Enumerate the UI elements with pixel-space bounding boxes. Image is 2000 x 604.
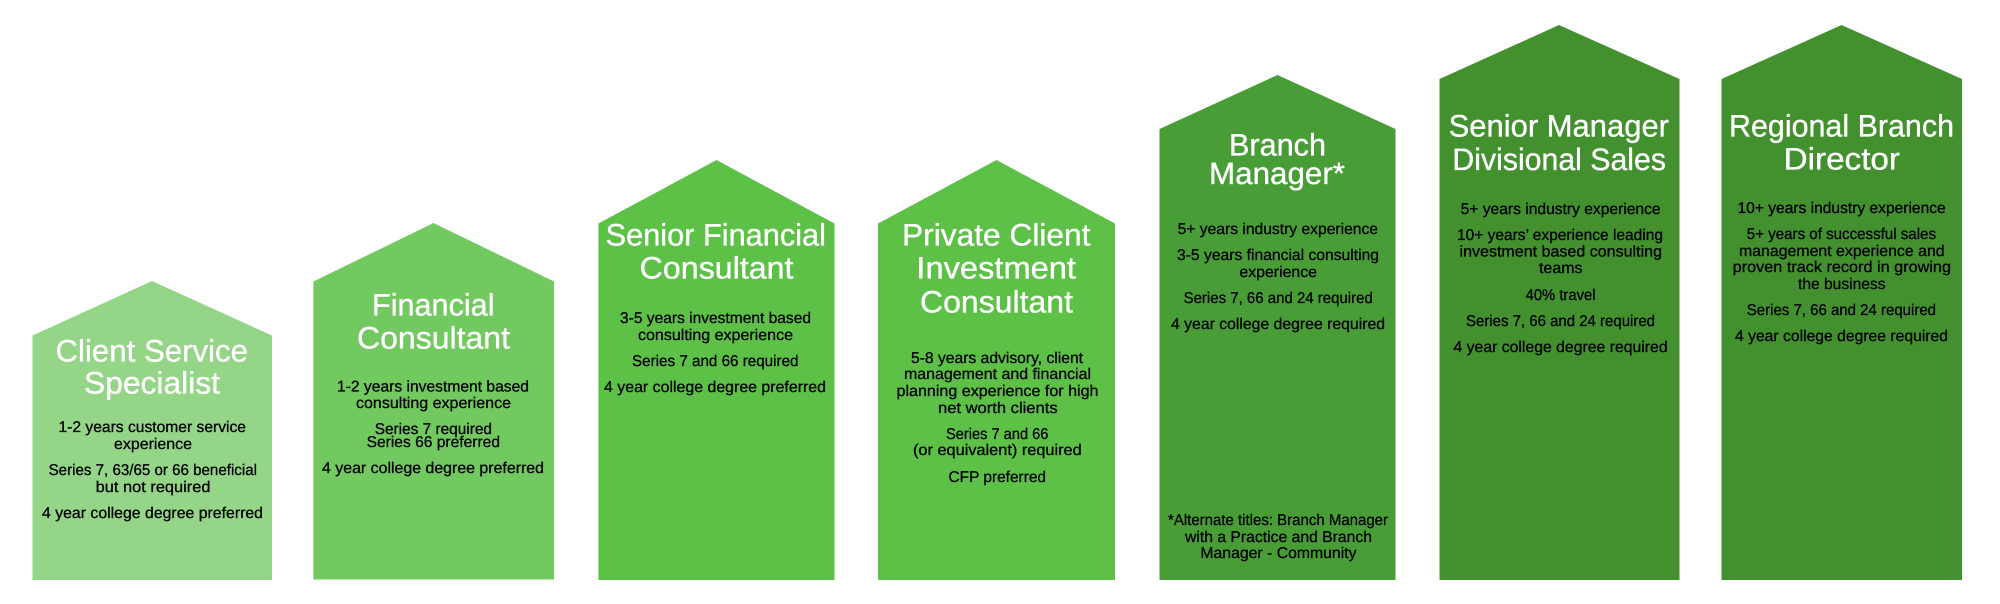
requirements: (or equivalent) required [913, 442, 1082, 459]
heading [902, 218, 1091, 319]
requirements: 40% travel [1526, 287, 1596, 304]
requirements: Series 7, 63/65 or 66 beneficial [49, 462, 257, 479]
heading: Senior Financial [606, 218, 826, 253]
heading: Branch [1229, 128, 1326, 163]
requirements: 4 year college degree preferred [322, 460, 544, 477]
heading [1729, 109, 1954, 177]
heading: Manager* [1209, 156, 1345, 191]
requirements: 4 year college degree required [1735, 328, 1948, 345]
requirements: 5+ years industry experience [1178, 221, 1378, 238]
requirements: 5+ years industry experience [1461, 201, 1661, 218]
panel: Senior Manager Divisional Sales [1440, 25, 1680, 580]
requirements: CFP preferred [948, 469, 1046, 486]
requirements: 4 year college degree preferred [604, 379, 826, 396]
requirements: Series 7, 66 and 24 required [1466, 313, 1655, 330]
heading [1449, 109, 1669, 177]
requirements: teams [1539, 260, 1583, 277]
house shape 1 [32, 281, 272, 580]
requirements: 5-8 years advisory, client [911, 350, 1084, 367]
requirements: experience [1239, 264, 1317, 281]
heading: Consultant [357, 320, 510, 355]
requirements: consulting experience [356, 395, 511, 412]
requirements [42, 419, 263, 522]
house shape 4 [878, 160, 1115, 580]
requirements: management and financial [904, 366, 1091, 383]
requirements: 4 year college degree required [1454, 339, 1668, 356]
requirements: 1-2 years investment based [337, 379, 529, 396]
house shape 7 [1722, 25, 1962, 580]
requirements [1171, 221, 1385, 333]
footnote: alternate titles [1168, 512, 1388, 562]
panel: Private Client Investment Consultant [878, 160, 1115, 580]
requirements: Series 7 and 66 [946, 426, 1048, 443]
requirements [1733, 200, 1951, 345]
heading: Director [1784, 142, 1900, 177]
requirements: proven track record in growing [1733, 259, 1951, 276]
requirements: net worth clients [938, 400, 1058, 417]
heading: Consultant [640, 251, 794, 286]
heading: Investment [916, 250, 1076, 285]
heading: Divisional Sales [1452, 142, 1666, 177]
requirements: the business [1798, 276, 1886, 293]
footnote: alternate titles: Manager - Community [1200, 545, 1357, 562]
requirements: Series 7 required [375, 421, 492, 438]
panel: Financial Consultant [313, 223, 554, 580]
requirements: 5+ years of successful sales [1747, 226, 1936, 243]
requirements: Series 7, 66 and 24 required [1747, 302, 1936, 319]
requirements: experience [114, 436, 192, 453]
requirements: management experience and [1739, 243, 1945, 260]
requirements [604, 310, 826, 396]
heading: Client Service [56, 333, 248, 368]
requirements: planning experience for high [896, 383, 1098, 400]
footnote: alternate titles: with a Practice and Branch [1184, 529, 1372, 546]
heading: Private Client [902, 218, 1091, 253]
requirements: Series 66 preferred [367, 434, 500, 451]
heading [606, 218, 826, 286]
requirements: 4 year college degree preferred [42, 505, 263, 522]
requirements: Series 7 and 66 required [632, 353, 798, 370]
requirements: consulting experience [638, 327, 793, 344]
requirements: 10+ years’ experience leading [1457, 227, 1663, 244]
requirements: 3-5 years financial consulting [1177, 247, 1379, 264]
heading [357, 288, 510, 355]
panel: Branch Manager [1160, 75, 1396, 580]
requirements: investment based consulting [1460, 244, 1662, 261]
house shape 2 [313, 223, 554, 580]
requirements: 10+ years industry experience [1738, 200, 1946, 217]
panel: Client Service Specialist [32, 281, 272, 580]
heading: Senior Manager [1449, 109, 1669, 144]
requirements: Series 7, 66 and 24 required [1184, 290, 1373, 307]
requirements [1454, 201, 1668, 356]
heading: Financial [372, 288, 494, 323]
house shape 3 [598, 160, 834, 580]
heading: Regional Branch [1729, 109, 1954, 144]
panel: Senior Financial Consultant [598, 160, 834, 580]
requirements: but not required [96, 479, 210, 496]
footnote: alternate titles: *Alternate titles: Branch Manager [1168, 512, 1388, 529]
requirements [322, 379, 544, 477]
requirements: 1-2 years customer service [58, 419, 246, 436]
requirements [896, 350, 1098, 486]
heading: Consultant [920, 284, 1073, 319]
heading [1209, 128, 1345, 191]
heading: Specialist [84, 366, 220, 401]
requirements: 3-5 years investment based [620, 310, 811, 327]
requirements: 4 year college degree required [1171, 316, 1385, 333]
house shape 6 [1440, 25, 1680, 580]
heading [56, 333, 248, 401]
panel: Regional Branch Director [1722, 25, 1962, 580]
house shape 5 [1160, 75, 1396, 580]
